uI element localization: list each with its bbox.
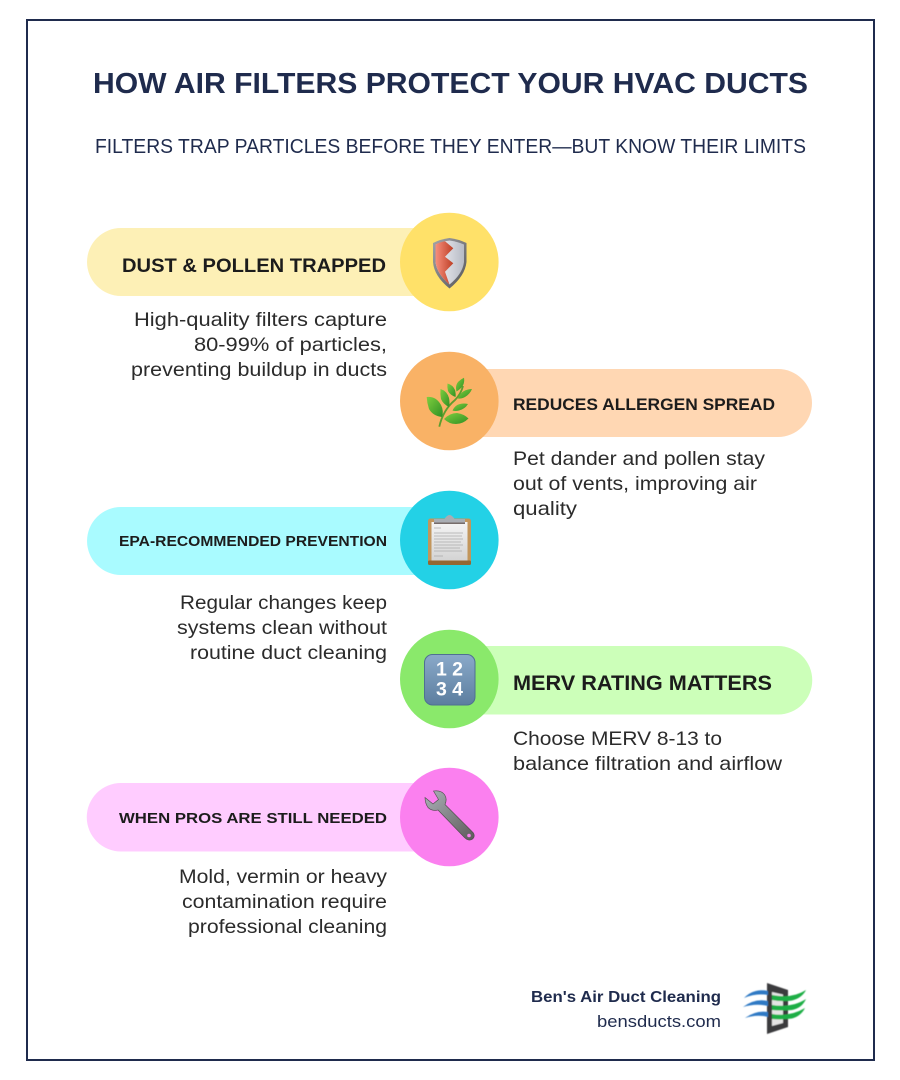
body text: allergen: Pet dander and pollen stay: [513, 448, 765, 470]
body text: EPA: Regular changes keep: [180, 592, 387, 614]
icon: 1234 tile: [424, 654, 475, 705]
icon: green leaf: [427, 378, 472, 427]
body text: EPA: routine duct cleaning: [190, 642, 387, 664]
body text: allergen: out of vents, improving air: [513, 473, 758, 495]
icon: clipboard: [428, 515, 471, 565]
panel: MERV rating matters: [400, 630, 812, 775]
body text: dust and pollen: [131, 309, 387, 381]
heading: pros: WHEN PROS ARE STILL NEEDED: [119, 810, 387, 827]
footer: website: bensducts.com: [597, 1013, 721, 1031]
icon circle: green: [400, 630, 499, 728]
panel: EPA-recommended prevention: [87, 491, 499, 664]
body text: pros: professional cleaning: [188, 916, 387, 938]
icon circle: cyan: [400, 491, 499, 589]
body text: dust and pollen: 80-99% of particles,: [194, 334, 387, 356]
title: HOW AIR FILTERS PROTECT YOUR HVAC DUCTS: [93, 68, 808, 100]
heading: EPA: EPA-RECOMMENDED PREVENTION: [119, 534, 387, 550]
icon circle: yellow: [400, 213, 499, 311]
body text: allergen: quality: [513, 498, 577, 520]
icon: wrench: [425, 791, 474, 840]
body text: EPA: [177, 592, 388, 664]
pill: pros: [87, 783, 450, 852]
icon circle: orange: [400, 352, 499, 450]
footer: company name: Ben's Air Duct Cleaning: [531, 989, 721, 1006]
body text: pros: [179, 866, 387, 938]
body text: allergen: [513, 448, 765, 520]
body text: EPA: systems clean without: [177, 617, 388, 639]
pill: allergen: [450, 369, 812, 437]
heading: allergen: REDUCES ALLERGEN SPREAD: [513, 396, 775, 414]
body text: dust and pollen: preventing buildup in ducts: [131, 359, 387, 381]
icon circle: pink: [400, 768, 499, 866]
heading: dust and pollen: DUST & POLLEN TRAPPED: [122, 256, 386, 277]
body text: pros: Mold, vermin or heavy: [179, 866, 387, 888]
pill: EPA: [87, 507, 450, 575]
icon: company logo: [743, 983, 806, 1034]
body text: dust and pollen: High-quality filters capture: [134, 309, 387, 331]
body text: pros: contamination require: [182, 891, 387, 913]
body text: MERV: balance filtration and airflow: [513, 753, 783, 775]
body text: MERV: [513, 728, 783, 775]
icon: 1234 tile: 1 2: [436, 659, 463, 681]
panel: dust and pollen trapped: [87, 213, 499, 381]
icon: shield: [433, 238, 466, 288]
body text: MERV: Choose MERV 8-13 to: [513, 728, 722, 750]
subtitle: FILTERS TRAP PARTICLES BEFORE THEY ENTER—BUT KNOW THEIR LIMITS: [95, 136, 806, 158]
icon: 1234 tile: 3 4: [436, 679, 463, 701]
panel: reduces allergen spread: [400, 352, 812, 520]
pill: MERV: [450, 646, 812, 714]
heading: MERV: MERV RATING MATTERS: [513, 672, 772, 695]
panel: when pros are still needed: [87, 768, 499, 938]
pill: dust and pollen: [87, 228, 450, 296]
